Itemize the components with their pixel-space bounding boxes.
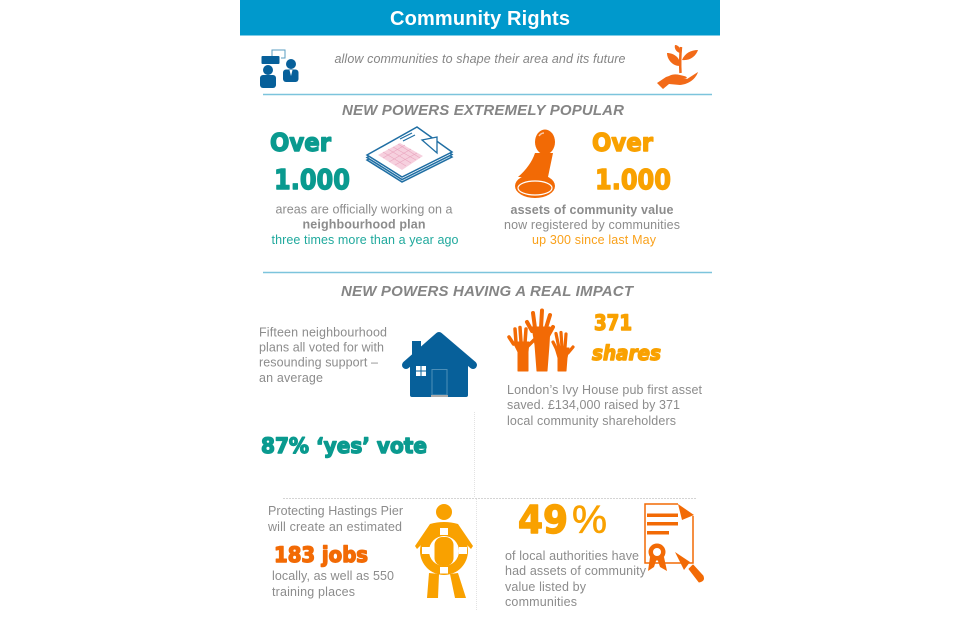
title banner: Community Rights <box>390 8 570 30</box>
icon: hand holding plant <box>657 45 698 89</box>
stat: over 1,000 assets: 1.000 <box>595 163 671 196</box>
stat: 87% yes vote: 87% ‘yes’ vote <box>261 434 427 458</box>
icon: people in conversation <box>260 50 298 88</box>
stat: over 1,000 assets: Over <box>592 128 654 157</box>
divider <box>263 94 712 96</box>
icon: house <box>406 336 473 397</box>
icon: application form <box>367 127 452 182</box>
text: local training places <box>272 569 394 599</box>
text: ivy house description: local community shareholders <box>507 414 676 428</box>
text: fifteen neighbourhood plans: an average <box>259 371 323 385</box>
stat: over 1,000 neighbourhood: 1.000 <box>274 163 350 196</box>
text: neighbourhood plan description <box>272 202 459 247</box>
panel: ivy house shares <box>507 310 703 428</box>
stat: 371 shares: 371 <box>594 311 632 335</box>
icon: person with life ring <box>415 504 473 598</box>
stat: 183 jobs: 183 jobs <box>274 543 368 567</box>
text: fifteen neighbourhood plans <box>259 326 387 385</box>
text: protecting hastings pier: will create an estimated <box>267 520 402 534</box>
icon: certificate and pen <box>645 504 704 582</box>
text: assets description: up 300 since last May <box>532 233 657 247</box>
text: local authorities description: of local authorities have <box>505 549 639 563</box>
text: local training places: training places <box>272 585 355 599</box>
stat: 49% <box>518 498 607 542</box>
stat: 371 shares <box>592 311 661 365</box>
text: local authorities description: had assets of community <box>505 564 647 578</box>
panel: neighbourhood votes <box>259 326 473 458</box>
heading: new powers having a real impact: NEW POWERS HAVING A REAL IMPACT <box>341 283 635 300</box>
icon: rubber stamp <box>515 130 555 198</box>
heading: new powers extremely popular: NEW POWERS EXTREMELY POPULAR <box>342 102 624 119</box>
text: local training places: locally, as well as 550 <box>272 569 394 583</box>
panel: assets of community value <box>504 128 680 247</box>
text: neighbourhood plan description: neighbourhood plan <box>302 218 426 232</box>
text: fifteen neighbourhood plans: plans all voted for with <box>259 340 384 354</box>
text: assets description: assets of community value <box>510 203 674 217</box>
panel: hastings pier <box>267 504 473 599</box>
panel: neighbourhood plans <box>270 127 459 247</box>
stat: over 1,000 neighbourhood: Over <box>270 128 332 157</box>
text: ivy house description: saved. £134,000 raised by 371 <box>507 398 680 412</box>
text: protecting hastings pier <box>267 504 403 534</box>
stat: over 1,000 neighbourhood <box>270 128 350 196</box>
title banner <box>240 0 720 36</box>
text: ivy house description: London’s Ivy House pub first asset <box>507 383 703 397</box>
text: assets description: now registered by communities <box>504 218 680 232</box>
stat: 371 shares: shares <box>592 341 661 365</box>
text: fifteen neighbourhood plans: Fifteen neighbourhood <box>259 326 387 340</box>
text: local authorities description: value listed by <box>505 580 587 594</box>
stat: 49%: % <box>572 499 607 542</box>
text: assets description <box>504 203 680 247</box>
icon: raised hands <box>509 310 573 371</box>
stat: 49%: 49 <box>518 498 568 542</box>
text: neighbourhood plan description: three times more than a year ago <box>272 233 459 247</box>
stat: over 1,000 assets <box>592 128 671 196</box>
divider <box>263 272 712 274</box>
text: local authorities description: communities <box>505 595 577 609</box>
text: fifteen neighbourhood plans: resounding support – <box>259 356 378 370</box>
text: neighbourhood plan description: areas are officially working on a <box>276 202 453 216</box>
text: protecting hastings pier: Protecting Hastings Pier <box>268 504 403 518</box>
subtitle: allow communities to shape their area and its future <box>334 52 626 66</box>
text: ivy house description <box>507 383 703 428</box>
text: local authorities description <box>505 549 647 609</box>
panel: local authorities 49% <box>505 498 704 609</box>
